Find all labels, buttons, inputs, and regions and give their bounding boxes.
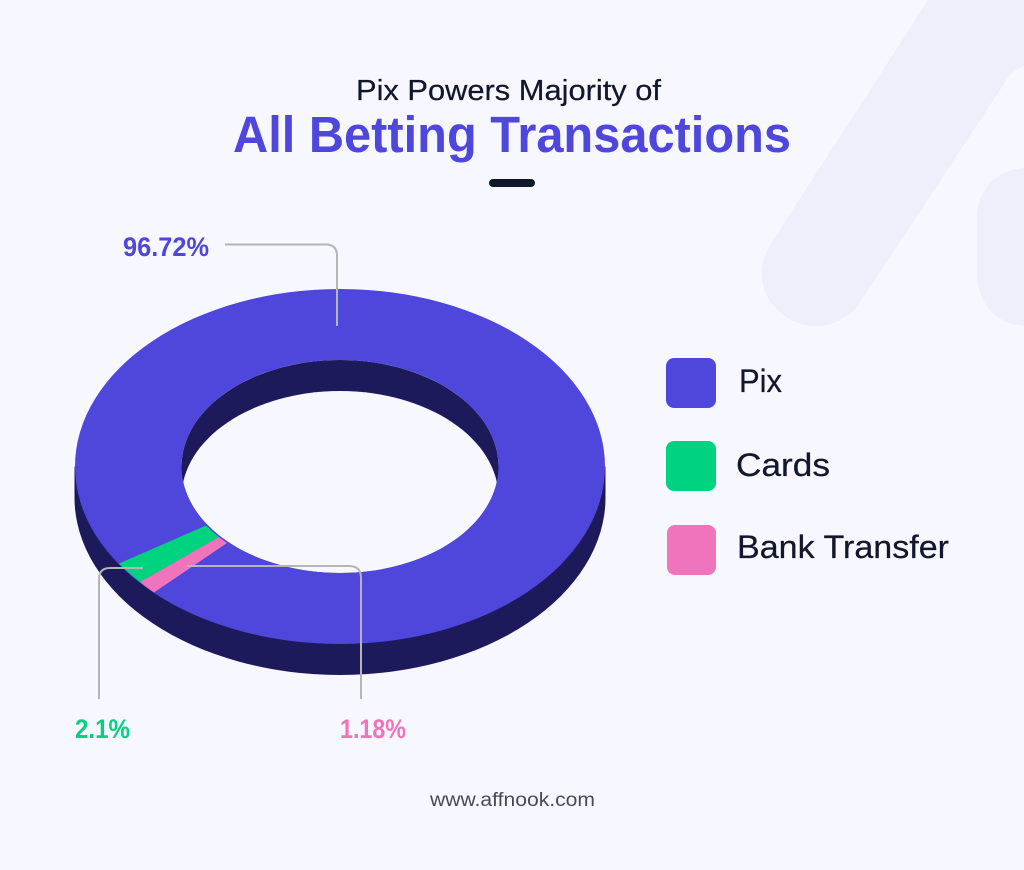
leader: Cards <box>99 568 143 699</box>
legend: Cards <box>666 441 830 491</box>
leader: Bank Transfer <box>187 566 361 699</box>
donut hole <box>183 391 497 573</box>
footer url: www.affnook.com <box>429 790 595 811</box>
legend: Pix <box>666 358 782 408</box>
legend: Bank Transfer <box>667 525 949 575</box>
legend: Pix: Pix <box>739 363 782 399</box>
legend: Cards: Cards <box>736 447 830 483</box>
donut side wall <box>74 466 606 675</box>
leader lines <box>99 244 361 699</box>
legend <box>666 358 949 575</box>
title line 1: Pix Powers Majority of <box>356 75 662 107</box>
leader: Pix <box>225 244 337 326</box>
value: Pix: 96.72% <box>123 232 209 262</box>
title line 2: All Betting Transactions <box>233 106 791 163</box>
value: Cards: 2.1% <box>75 714 130 744</box>
title <box>233 75 791 163</box>
value labels <box>75 232 406 744</box>
infographic canvas <box>74 78 949 806</box>
donut chart <box>74 289 606 675</box>
background logo shape <box>762 0 1024 326</box>
donut inner wall <box>182 360 498 573</box>
value: Bank Transfer: 1.18% <box>340 714 406 744</box>
slice: Bank Transfer <box>140 537 227 592</box>
legend: Bank Transfer: Bank Transfer <box>737 529 949 565</box>
title divider <box>489 179 535 187</box>
slice: Pix <box>75 289 605 644</box>
slice: Cards <box>119 526 219 582</box>
